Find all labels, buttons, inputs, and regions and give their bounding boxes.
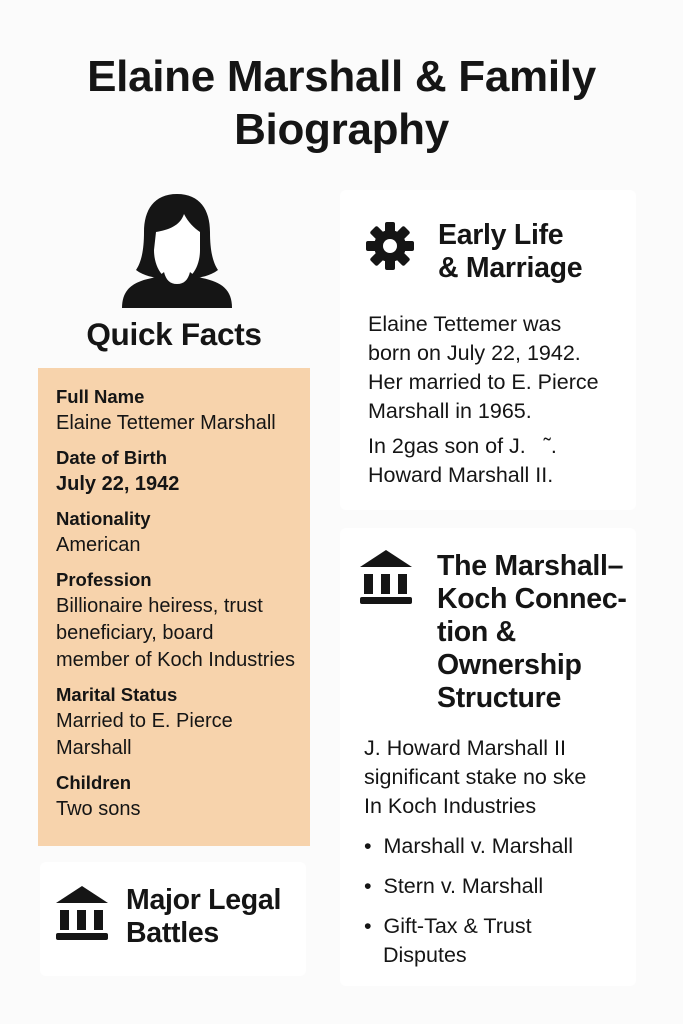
list: legal cases — [364, 834, 573, 967]
title: Biography — [234, 105, 449, 154]
icon: woman avatar — [122, 194, 232, 308]
fact: children: Two sons — [56, 798, 140, 820]
fact: profession: beneficiary, board — [56, 622, 214, 644]
text: stake: significant stake no ske — [364, 765, 586, 789]
heading: early life: & Marriage — [438, 252, 582, 284]
text: early life: Elaine Tettemer was — [368, 312, 561, 336]
fact: profession: Profession — [56, 569, 152, 590]
text: early life — [368, 312, 599, 487]
heading: marshall-koch: Structure — [437, 682, 561, 714]
heading: early life — [438, 219, 582, 284]
fact: nationality: American — [56, 534, 140, 556]
text: stake: In Koch Industries — [364, 794, 536, 818]
list: legal cases: • Stern v. Marshall — [364, 874, 543, 898]
title — [87, 52, 596, 154]
title: Elaine Marshall & Family — [87, 52, 596, 101]
text: early life: Howard Marshall II. — [368, 463, 553, 487]
heading: major legal battles: Major Legal — [126, 884, 281, 916]
icon: courthouse — [56, 886, 108, 940]
fact: date of birth: July 22, 1942 — [56, 473, 179, 495]
heading: major legal battles — [126, 884, 281, 949]
text: early life: Her married to E. Pierce — [368, 370, 599, 394]
fact: marital status — [56, 684, 233, 759]
list: legal cases: • Gift-Tax & Trust — [364, 914, 532, 938]
fact: full name: Elaine Tettemer Marshall — [56, 412, 276, 434]
list: legal cases: • Marshall v. Marshall — [364, 834, 573, 858]
text: stake — [364, 736, 586, 818]
panel: early life & marriage — [340, 190, 636, 510]
fact: nationality: Nationality — [56, 508, 151, 529]
fact: profession: Billionaire heiress, trust — [56, 595, 263, 617]
fact: profession — [56, 569, 295, 671]
panel: marshall-koch connection — [340, 528, 636, 986]
list: legal cases: Disputes — [383, 943, 467, 967]
fact: children: Children — [56, 772, 131, 793]
heading: marshall-koch: tion & — [437, 616, 516, 648]
icon: gear — [366, 222, 414, 270]
heading: Quick Facts: Quick Facts — [86, 316, 262, 352]
text: stake: J. Howard Marshall II — [364, 736, 566, 760]
fact: profession: member of Koch Industries — [56, 649, 295, 671]
fact: date of birth — [56, 447, 179, 495]
fact: marital status: Marshall — [56, 737, 132, 759]
text: early life: Marshall in 1965. — [368, 399, 532, 423]
text: early life: born on July 22, 1942. — [368, 341, 581, 365]
fact: full name: Full Name — [56, 386, 144, 407]
heading: early life: Early Life — [438, 219, 563, 251]
text: early life: In 2gas son of J. ˜. — [368, 434, 557, 458]
panel: major legal battles — [40, 862, 306, 976]
heading: marshall-koch — [437, 550, 627, 714]
heading: marshall-koch: The Marshall– — [437, 550, 623, 582]
fact: nationality — [56, 508, 151, 556]
panel: quick facts — [38, 368, 310, 846]
fact: date of birth: Date of Birth — [56, 447, 167, 468]
fact: full name — [56, 386, 276, 434]
heading: marshall-koch: Ownership — [437, 649, 582, 681]
fact: children — [56, 772, 140, 820]
icon: courthouse — [360, 550, 412, 604]
fact: marital status: Married to E. Pierce — [56, 710, 233, 732]
heading: major legal battles: Battles — [126, 917, 219, 949]
heading: marshall-koch: Koch Connec- — [437, 583, 627, 615]
fact: marital status: Marital Status — [56, 684, 177, 705]
